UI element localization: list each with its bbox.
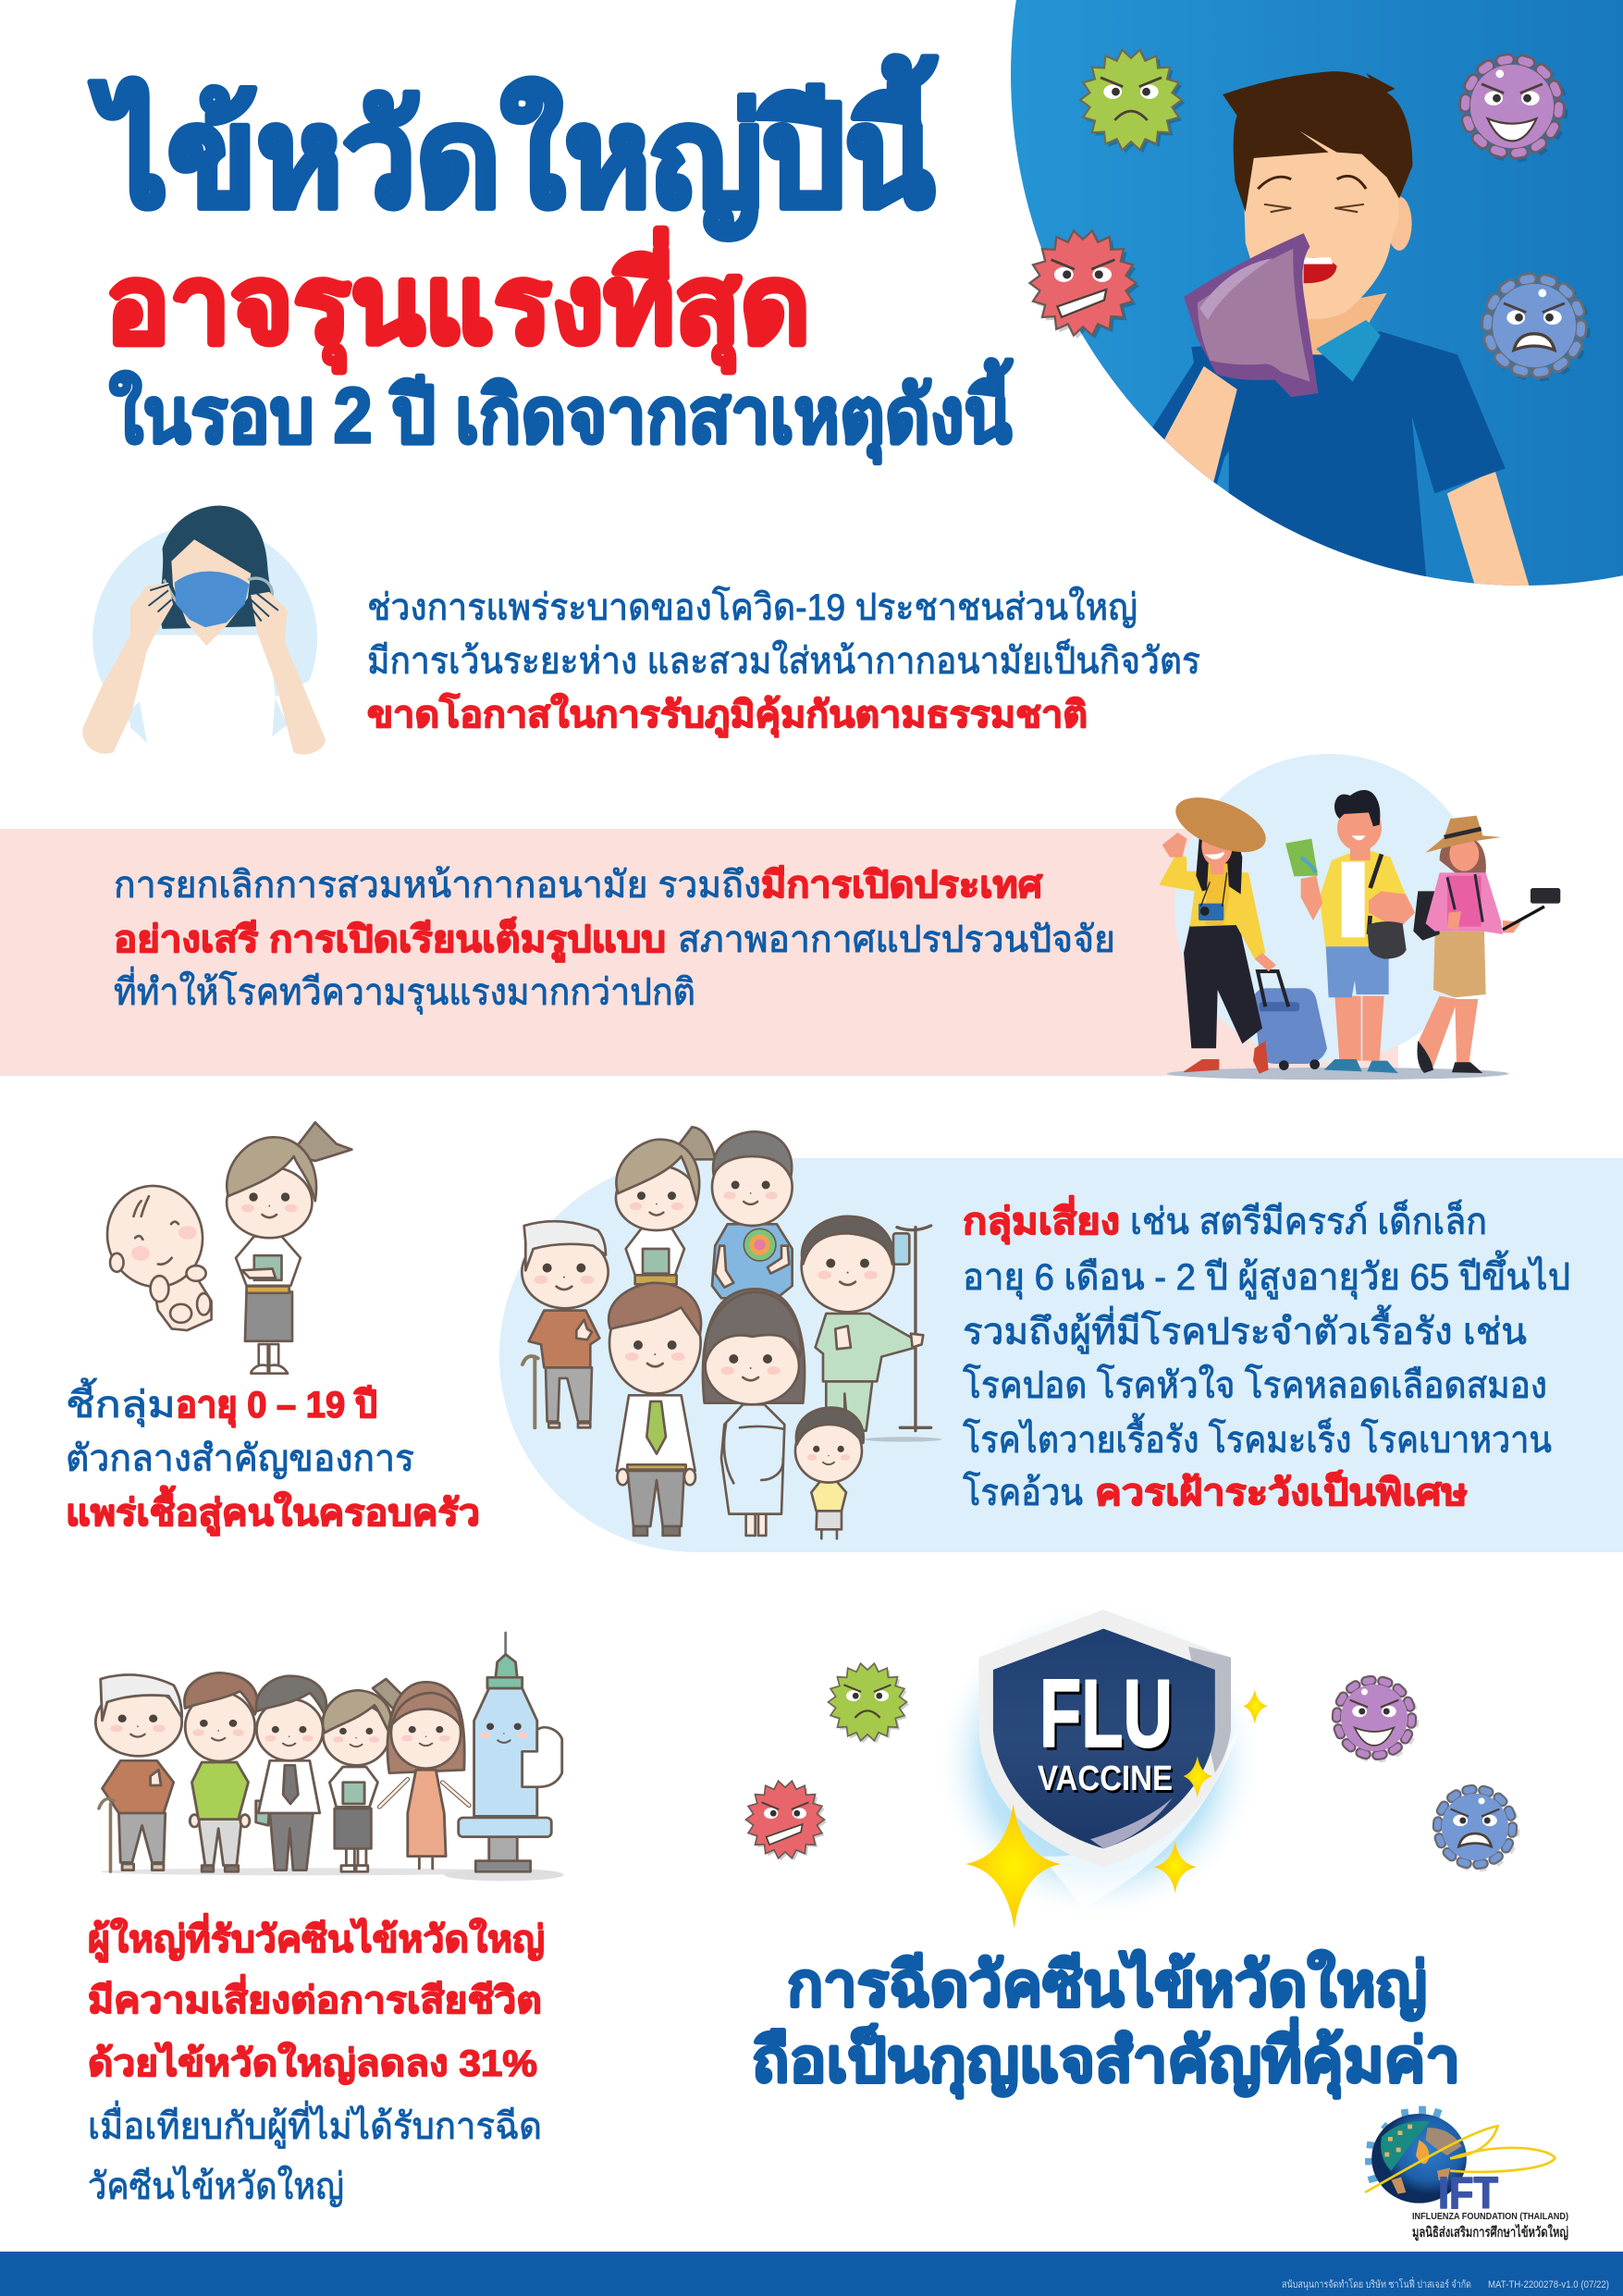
text block 2: reopening: สภาพอากาศแปรปรวนปัจจัย [678, 920, 1115, 960]
text block 3: ages 0-19: แพร่เชื้อสู่คนในครอบครัว [66, 1486, 480, 1536]
text block 2: reopening: มีการเปิดประเทศ [761, 865, 1043, 906]
shield drawing [934, 1600, 1268, 1929]
old man [522, 1221, 609, 1427]
text block 1: natural immunity: ช่วงการแพร่ระบาดของโควิด-19 ประชาชนส่วนใหญ่ [367, 586, 1137, 628]
virus: red small [745, 1781, 827, 1860]
text block 1: natural immunity [367, 586, 1200, 738]
man in green shirt [185, 1673, 257, 1871]
text block 4: risk groups: อายุ 6 เดือน - 2 ปี ผู้สูงอายุวัย 65 ปีขึ้นไป [963, 1250, 1570, 1300]
traveller woman with selfie stick [1413, 816, 1560, 1073]
text block 5: adult vaccine benefit: มีความเสี่ยงต่อการเสียชีวิต [88, 1974, 542, 2021]
man with lollipop [712, 1131, 793, 1298]
virus: purple [1465, 59, 1562, 156]
man with tie [256, 1676, 326, 1870]
icon: baby and schoolgirl [93, 1122, 351, 1374]
title line 1: ไข้หวัดใหญ่ปีนี้ [90, 56, 936, 240]
traveller man with map [1285, 790, 1415, 1073]
schoolgirl [323, 1679, 410, 1871]
text block 5: adult vaccine benefit: วัคซีนไข้หวัดใหญ่ [88, 2165, 344, 2207]
text block 4: risk groups: ควรเฝ้าระวังเป็นพิเศษ [1095, 1469, 1468, 1513]
title line 2: อาจรุนแรงที่สุด [105, 228, 810, 373]
text block 4: risk groups: โรคอ้วน [963, 1472, 1083, 1513]
schoolgirl [227, 1122, 351, 1374]
icon: travellers [1159, 754, 1560, 1080]
icon: people with syringe [95, 1633, 564, 1881]
shield text: VACCINE [1039, 1762, 1174, 1801]
hero circle background [1011, 0, 1623, 586]
cartoon syringe [459, 1633, 562, 1871]
icon: flu vaccine shield [934, 1600, 1268, 1929]
hero: sneezing man with viruses [1011, 0, 1623, 601]
text block 5: adult vaccine benefit [88, 1913, 545, 2207]
heading: vaccine is key: ถือเป็นกุญแจสำคัญที่คุ้มค่า [752, 2017, 1460, 2099]
icon: woman putting on mask [55, 506, 330, 773]
virus: blue small [1438, 1790, 1515, 1867]
text block 4: risk groups: เช่น สตรีมีครรภ์ เด็กเล็ก [1130, 1199, 1487, 1242]
footer bar: สนับสนุนการจัดทำโดย บริษัท ซาโนฟี่ ปาสเจอร์ จำกัด [1282, 2277, 1471, 2290]
text block 5: adult vaccine benefit: เมื่อเทียบกับผู้ที่ไม่ได้รับการฉีด [88, 2101, 542, 2148]
logo: Influenza Foundation Thailand: IFT [1438, 2169, 1498, 2218]
lollipop [744, 1228, 776, 1261]
virus: red [1030, 230, 1139, 339]
title [90, 56, 1014, 464]
text block 5: adult vaccine benefit: ด้วยไข้หวัดใหญ่ลดลง 31% [88, 2042, 537, 2085]
man illustration [1150, 71, 1531, 601]
text block 3: ages 0-19 [66, 1377, 480, 1536]
shield text: FLU [1042, 1664, 1175, 1771]
text block 4: risk groups: รวมถึงผู้ที่มีโรคประจำตัวเรื้อรัง เช่น [963, 1304, 1527, 1353]
text block 2: reopening: ที่ทำให้โรคทวีความรุนแรงมากกว่าปกติ [114, 967, 695, 1015]
shield text: FLU [1039, 1660, 1173, 1768]
heading: vaccine is key: การฉีดวัคซีนไข้หวัดใหญ่ [787, 1948, 1427, 2020]
pregnant woman [703, 1289, 805, 1536]
footer bar: MAT-TH-2200278-v1.0 (07/22) [1488, 2279, 1609, 2290]
text block 1: natural immunity: ขาดโอกาสในการรับภูมิคุ้มกันตามธรรมชาติ [367, 693, 1088, 738]
text block 4: risk groups: โรคไตวายเรื้อรัง โรคมะเร็ง โรคเบาหวาน [963, 1413, 1552, 1461]
boy [795, 1408, 864, 1538]
baby [93, 1172, 216, 1330]
virus: green small [829, 1663, 909, 1743]
grandfather [95, 1674, 182, 1871]
sparkles [965, 1804, 1061, 1929]
text block 3: ages 0-19: ชี้กลุ่ม [66, 1377, 176, 1427]
shield text: VACCINE [1038, 1759, 1173, 1798]
logo: Influenza Foundation Thailand: INFLUENZA FOUNDATION (THAILAND) [1412, 2212, 1568, 2222]
virus: blue [1487, 278, 1584, 376]
icon: risk groups family [522, 1127, 941, 1538]
text block 2: reopening [114, 865, 1115, 1015]
text block 5: adult vaccine benefit: ผู้ใหญ่ที่รับวัคซีนไข้หวัดใหญ่ [88, 1913, 545, 1962]
text block 3: ages 0-19: ตัวกลางสำคัญของการ [66, 1438, 414, 1479]
title line 3: ในรอบ 2 ปี เกิดจากสาเหตุดังนี้ [109, 358, 1014, 464]
panel: pink band [0, 829, 1398, 1076]
schoolgirl back [616, 1127, 715, 1284]
traveller woman with suitcase [1159, 786, 1327, 1074]
patient with IV pole [802, 1216, 931, 1431]
woman in peach dress [379, 1682, 469, 1869]
footer bar [0, 2252, 1623, 2296]
text block 4: risk groups: กลุ่มเสี่ยง [963, 1195, 1120, 1245]
logo: Influenza Foundation Thailand [1365, 2106, 1568, 2241]
text block 1: natural immunity: มีการเว้นระยะห่าง และสวมใส่หน้ากากอนามัยเป็นกิจวัตร [367, 638, 1200, 682]
virus: purple small [1337, 1681, 1414, 1758]
text block 4: risk groups: โรคปอด โรคหัวใจ โรคหลอดเลือดสมอง [963, 1364, 1547, 1406]
panel: light blue band [499, 1158, 1623, 1552]
virus: green [1080, 50, 1185, 153]
text block 2: reopening: อย่างเสรี การเปิดเรียนเต็มรูปแบบ [114, 916, 666, 962]
text block 4: risk groups [963, 1195, 1570, 1513]
logo: Influenza Foundation Thailand: มูลนิธิส่งเสริมการศึกษาไข้หวัดใหญ่ [1412, 2223, 1568, 2241]
heading: vaccine is key [752, 1948, 1460, 2099]
text block 3: ages 0-19: อายุ 0 – 19 ปี [176, 1385, 377, 1428]
shield text [1038, 1660, 1175, 1801]
text block 2: reopening: การยกเลิกการสวมหน้ากากอนามัย รวมถึง [114, 865, 761, 906]
man with green tie [609, 1283, 701, 1536]
